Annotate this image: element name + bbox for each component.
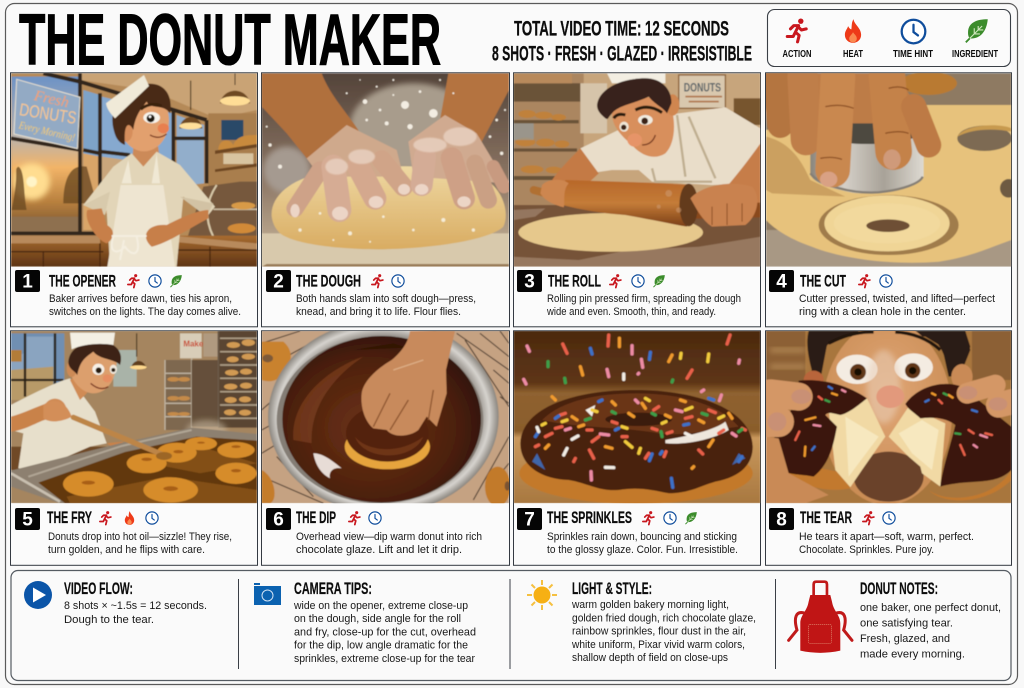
illustration: baker in bakery at sunrise: Every Morning! bbox=[17, 119, 76, 144]
camera tips text: for the dip, low angle dramatic for the bbox=[294, 640, 468, 652]
illustration: baker flipping donuts in fryer bbox=[11, 331, 257, 504]
icon: action bbox=[610, 274, 621, 288]
number badge 7 bbox=[517, 508, 542, 530]
illustration: baker flipping donuts in fryer: Make bbox=[183, 340, 204, 349]
caption text 6: chocolate glaze. Lift and let it drip. bbox=[296, 544, 462, 556]
icon: time hint bbox=[893, 20, 933, 60]
light and style text: shallow depth of field on close-ups bbox=[572, 652, 728, 664]
panel: bottom notes bbox=[11, 570, 1011, 680]
icon: time bbox=[369, 512, 381, 524]
caption box 3 bbox=[514, 73, 760, 327]
caption text 5: turn golden, and he flips with care. bbox=[48, 544, 205, 556]
caption text 8: He tears it apart—soft, warm, perfect. bbox=[799, 531, 974, 543]
number badge 4: 4 bbox=[776, 272, 787, 292]
icon: ingredient bbox=[685, 512, 697, 524]
illustration: baker in bakery at sunrise bbox=[11, 73, 257, 267]
caption text 1 bbox=[49, 293, 241, 318]
caption box 2 bbox=[262, 73, 510, 327]
camera tips text: CAMERA TIPS: bbox=[294, 580, 372, 598]
caption box 8 bbox=[766, 331, 1012, 565]
panel: shot 5 the fry bbox=[10, 331, 258, 565]
caption text 7 bbox=[547, 531, 738, 556]
icon: sun bbox=[527, 580, 557, 610]
heading 5: THE FRY bbox=[47, 509, 92, 527]
heading 2: THE DOUGH bbox=[296, 272, 361, 290]
panel: shot 4 the cut bbox=[766, 72, 1017, 327]
caption text 6 bbox=[296, 531, 482, 556]
illustration: baker rolling dough: DONUTS bbox=[684, 81, 721, 95]
donut notes text: Fresh, glazed, and bbox=[860, 633, 950, 645]
camera tips text: and fry, close-up for the cut, overhead bbox=[294, 626, 476, 638]
number badge 8 bbox=[769, 508, 794, 530]
caption text 7: to the glossy glaze. Color. Fun. Irresistible. bbox=[547, 544, 738, 556]
heading 6: THE DIP bbox=[296, 509, 336, 527]
donut notes text: made every morning. bbox=[860, 648, 965, 660]
title: THE DONUT MAKER bbox=[19, 0, 441, 80]
caption text 2 bbox=[296, 293, 476, 318]
light and style text: golden fried dough, rich chocolate glaze, bbox=[572, 612, 756, 624]
icon: ingredient bbox=[952, 19, 998, 60]
number badge 4 bbox=[769, 270, 794, 292]
number badge 6 bbox=[266, 508, 291, 530]
donut notes text: one satisfying tear. bbox=[860, 618, 953, 630]
icon: action bbox=[859, 274, 870, 288]
panel: shot 1 the opener bbox=[10, 73, 258, 327]
number badge 2 bbox=[266, 270, 291, 292]
caption text 4: Cutter pressed, twisted, and lifted—perfect bbox=[799, 293, 995, 305]
caption text 1: Baker arrives before dawn, ties his apron, bbox=[49, 293, 232, 305]
caption text 1: switches on the lights. The day comes alive. bbox=[49, 306, 241, 318]
icon: action bbox=[100, 511, 111, 525]
illustration: sprinkles falling on chocolate donut bbox=[514, 331, 760, 504]
video flow text bbox=[64, 580, 207, 626]
header subtitle: TOTAL VIDEO TIME: 12 SECONDS bbox=[514, 18, 729, 40]
heading 8: THE TEAR bbox=[800, 509, 852, 527]
icon: camera bbox=[254, 583, 281, 605]
number badge 8: 8 bbox=[776, 510, 787, 530]
video flow text: Dough to the tear. bbox=[64, 614, 154, 626]
icon: time bbox=[632, 275, 644, 287]
icon: time bbox=[880, 275, 892, 287]
illustration: baker in bakery at sunrise: Fresh bbox=[32, 87, 71, 111]
icon: ingredient: INGREDIENT bbox=[952, 49, 998, 60]
number badge 6: 6 bbox=[273, 510, 284, 530]
icon: action bbox=[372, 274, 383, 288]
number badge 5: 5 bbox=[22, 510, 33, 530]
icon: ingredient bbox=[653, 275, 665, 287]
illustration: hands kneading dough bbox=[262, 73, 509, 267]
panel: shot 7 the sprinkles bbox=[514, 331, 760, 565]
camera tips text bbox=[293, 580, 476, 665]
illustration: baker tearing donut in half bbox=[766, 331, 1012, 504]
light and style text: rainbow sprinkles, flour dust in the air, bbox=[572, 626, 746, 638]
number badge 3: 3 bbox=[524, 272, 535, 292]
caption box 7 bbox=[514, 331, 760, 565]
panel: shot 3 the roll bbox=[514, 73, 760, 327]
icon: heat: HEAT bbox=[843, 49, 863, 60]
panel: shot 2 the dough bbox=[262, 73, 510, 327]
icon legend bbox=[768, 10, 1010, 66]
caption text 8 bbox=[799, 531, 974, 556]
heading 3: THE ROLL bbox=[548, 272, 601, 290]
caption text 6: Overhead view—dip warm donut into rich bbox=[296, 531, 482, 543]
number badge 2: 2 bbox=[273, 272, 284, 292]
header subtitle: 8 SHOTS · FRESH · GLAZED · IRRESISTIBLE bbox=[492, 42, 752, 66]
icon: time bbox=[149, 275, 161, 287]
caption box 5 bbox=[10, 331, 258, 565]
caption text 3: wide and even. Smooth, thin, and ready. bbox=[546, 306, 716, 318]
light and style text: warm golden bakery morning light, bbox=[571, 599, 729, 611]
icon: time bbox=[664, 512, 676, 524]
caption text 5 bbox=[48, 531, 232, 556]
camera tips text: wide on the opener, extreme close-up bbox=[293, 600, 468, 612]
caption text 2: Both hands slam into soft dough—press, bbox=[296, 293, 476, 305]
panel: shot 8 the tear bbox=[766, 322, 1012, 565]
caption text 4: ring with a clean hole in the center. bbox=[799, 306, 966, 318]
number badge 1: 1 bbox=[22, 272, 33, 292]
video flow text: 8 shots × ~1.5s = 12 seconds. bbox=[64, 600, 207, 612]
icon: action bbox=[782, 18, 812, 60]
light and style text: LIGHT & STYLE: bbox=[572, 580, 652, 598]
icon: action bbox=[128, 274, 139, 288]
caption text 3 bbox=[546, 293, 741, 318]
donut notes text: DONUT NOTES: bbox=[860, 580, 938, 598]
caption text 8: Chocolate. Sprinkles. Pure joy. bbox=[799, 544, 934, 556]
header subtitle bbox=[492, 18, 752, 66]
caption box 4 bbox=[766, 73, 1012, 327]
icon: heat bbox=[843, 19, 863, 60]
video flow text: VIDEO FLOW: bbox=[64, 580, 133, 598]
illustration: baker in bakery at sunrise: DONUTS bbox=[18, 99, 78, 128]
heading 7: THE SPRINKLES bbox=[547, 509, 632, 527]
icon: ingredient bbox=[170, 275, 182, 287]
icon: apron bbox=[789, 582, 852, 653]
caption text 5: Donuts drop into hot oil—sizzle! They rise, bbox=[48, 531, 232, 543]
heading 4: THE CUT bbox=[800, 272, 846, 290]
illustration: baker rolling dough bbox=[514, 73, 760, 267]
caption box 1 bbox=[10, 73, 258, 327]
number badge 5 bbox=[15, 508, 40, 530]
donut notes text: one baker, one perfect donut, bbox=[860, 602, 1001, 614]
notes box bbox=[11, 570, 1011, 680]
panel: shot 6 the dip bbox=[262, 320, 510, 565]
caption box 6 bbox=[262, 331, 510, 565]
icon: action: ACTION bbox=[782, 49, 812, 60]
caption text 4 bbox=[799, 293, 995, 318]
camera tips text: on the dough, side angle for the roll bbox=[294, 613, 461, 625]
light and style text: white uniform, Pixar vivid warm colors, bbox=[571, 639, 745, 651]
icon: time bbox=[146, 512, 158, 524]
donut notes text bbox=[860, 580, 1001, 660]
heading 1: THE OPENER bbox=[49, 272, 116, 290]
icon: time hint: TIME HINT bbox=[893, 49, 933, 60]
icon: action bbox=[349, 511, 360, 525]
icon: time bbox=[883, 512, 895, 524]
caption text 7: Sprinkles rain down, bouncing and sticking bbox=[547, 531, 737, 543]
icon: action bbox=[643, 511, 654, 525]
icon: time bbox=[392, 275, 404, 287]
caption text 3: Rolling pin pressed firm, spreading the dough bbox=[547, 293, 741, 305]
caption text 2: knead, and bring it to life. Flour flies. bbox=[296, 306, 461, 318]
number badge 3 bbox=[517, 270, 542, 292]
light and style text bbox=[571, 580, 756, 664]
illustration: dipping donut in chocolate glaze bbox=[262, 331, 509, 504]
number badge 1 bbox=[15, 270, 40, 292]
icon: heat bbox=[125, 511, 134, 525]
icon: action bbox=[863, 511, 874, 525]
number badge 7: 7 bbox=[524, 510, 535, 530]
icon: play bbox=[24, 581, 52, 609]
illustration: cutter pressing donut ring bbox=[766, 73, 1012, 267]
camera tips text: sprinkles, extreme close-up for the tear bbox=[294, 653, 475, 665]
